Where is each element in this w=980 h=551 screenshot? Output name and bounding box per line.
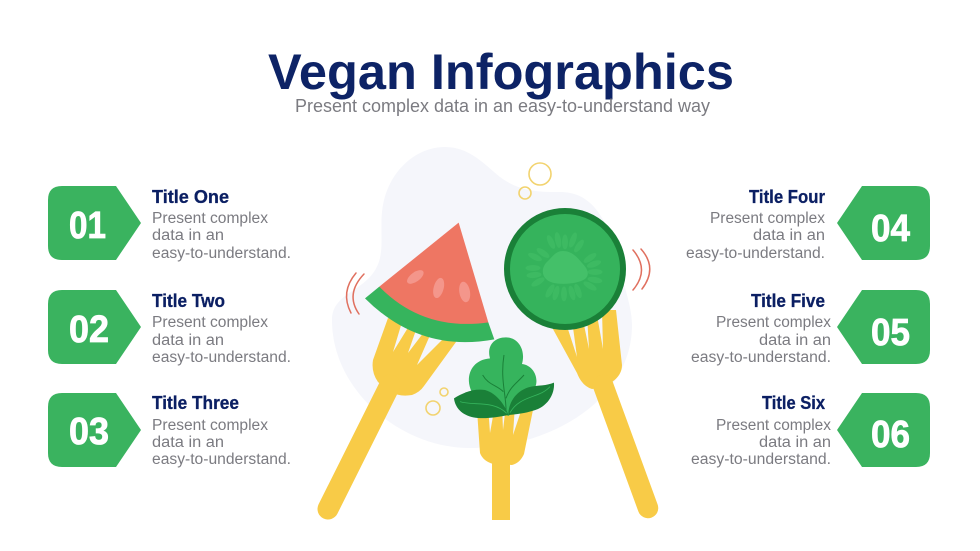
- badge 03: [48, 393, 141, 467]
- bubbles: [426, 163, 551, 415]
- body text: Present complex: [716, 417, 831, 434]
- item 03: [48, 393, 291, 468]
- subtitle: Present complex data in an easy-to-understand way: [295, 96, 710, 116]
- right fork: [548, 310, 648, 508]
- title: Vegan Infographics: [268, 44, 734, 100]
- number 02: 02: [69, 309, 109, 351]
- item 06: [691, 393, 930, 468]
- number 01: 01: [69, 205, 106, 247]
- body text: easy-to-understand.: [152, 245, 291, 262]
- body text: Present complex: [152, 417, 268, 434]
- body text: Present complex: [152, 210, 268, 227]
- body text: easy-to-understand.: [152, 349, 291, 366]
- heading: Title Six: [762, 393, 825, 413]
- central illustration: [328, 147, 650, 520]
- body text: Present complex: [710, 210, 825, 227]
- item 04: [686, 186, 930, 262]
- badge 04: [837, 186, 930, 260]
- item 01: [48, 186, 291, 262]
- leafy greens: [454, 337, 554, 418]
- heading: Title Five: [751, 291, 825, 311]
- item 02: [48, 290, 291, 366]
- middle fork: [477, 405, 534, 520]
- body text: easy-to-understand.: [686, 245, 825, 262]
- motion lines: [347, 249, 650, 314]
- heading: Title Two: [152, 291, 225, 311]
- body text: data in an: [759, 434, 831, 451]
- badge 06: [837, 393, 930, 467]
- number 06: 06: [871, 414, 910, 456]
- body text: Present complex: [152, 314, 268, 331]
- badge 01: [48, 186, 141, 260]
- body text: easy-to-understand.: [691, 451, 831, 468]
- cucumber slice: [507, 211, 623, 327]
- item 05: [691, 290, 930, 366]
- heading: Title One: [152, 187, 229, 207]
- body text: data in an: [753, 227, 825, 244]
- body text: data in an: [759, 332, 831, 349]
- body text: data in an: [152, 332, 224, 349]
- left fork: [328, 318, 456, 509]
- number 05: 05: [871, 312, 910, 354]
- body text: data in an: [152, 434, 224, 451]
- body text: data in an: [152, 227, 224, 244]
- heading: Title Four: [749, 187, 825, 207]
- body text: Present complex: [716, 314, 831, 331]
- background blob: [332, 147, 632, 448]
- heading: Title Three: [152, 393, 239, 413]
- badge 02: [48, 290, 141, 364]
- badge 05: [837, 290, 930, 364]
- body text: easy-to-understand.: [152, 451, 291, 468]
- watermelon slice: [365, 223, 494, 342]
- number 03: 03: [69, 411, 109, 453]
- number 04: 04: [871, 208, 910, 250]
- body text: easy-to-understand.: [691, 349, 831, 366]
